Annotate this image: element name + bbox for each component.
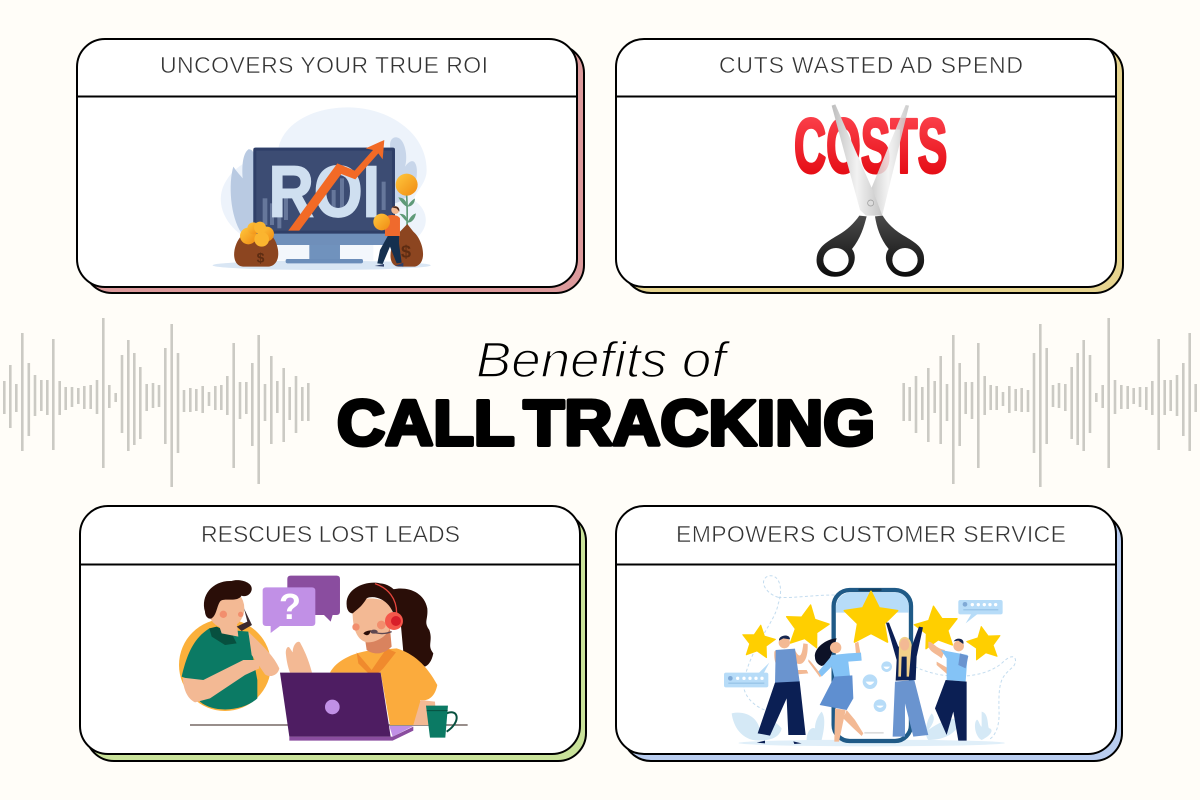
scissors handles	[817, 216, 924, 277]
illustration: people holding rating stars	[724, 576, 1016, 746]
icon: left money bag	[234, 222, 278, 267]
title	[337, 332, 875, 459]
growth arrow	[288, 140, 384, 231]
card body	[616, 39, 1116, 287]
illustration: caller and support agent	[179, 576, 468, 741]
figure: woman in blue skirt	[808, 638, 863, 742]
icon: smartphone	[834, 589, 911, 741]
table line	[190, 723, 468, 727]
card heading: CUTS WASTED AD SPEND	[719, 52, 1023, 78]
icon: purple laptop	[280, 673, 413, 741]
panel: uncovers your true ROI	[76, 39, 584, 293]
title line: Benefits of: Benefits of	[476, 332, 731, 388]
figure: blonde woman with raised arms	[886, 623, 928, 737]
figure: male caller	[179, 580, 279, 711]
icon: green mug	[426, 706, 457, 738]
icon: lilac question bubble: ?	[279, 586, 301, 627]
card shadow: green	[86, 513, 586, 761]
icon: purple speech bubble back	[287, 576, 340, 622]
card body	[616, 506, 1116, 754]
ground shadow	[738, 740, 1005, 746]
card heading: UNCOVERS YOUR TRUE ROI	[160, 52, 488, 78]
panel: empowers customer service	[615, 506, 1122, 761]
panel: cuts wasted ad spend	[615, 39, 1123, 293]
card body	[77, 39, 577, 287]
right sound waveform	[902, 318, 1197, 487]
figure: man carrying coin	[373, 206, 403, 267]
figure: man in light blue shirt	[928, 639, 968, 741]
icon: red headset	[370, 584, 403, 634]
dashed background trails	[743, 576, 1016, 740]
foliage	[732, 712, 992, 741]
scissors blades	[867, 105, 909, 216]
card heading: EMPOWERS CUSTOMER SERVICE	[676, 521, 1066, 547]
card shadow: yellow	[623, 45, 1123, 293]
card shadow: blue	[623, 513, 1122, 761]
illustration: scissors cutting costs	[794, 104, 947, 277]
icon: left money bag: $	[257, 249, 265, 265]
panel: rescues lost leads	[79, 506, 586, 761]
icon: right money bag and coin plant	[391, 174, 423, 267]
card heading: RESCUES LOST LEADS	[201, 521, 460, 547]
figure: man in vest	[757, 636, 808, 744]
figure: female agent with headset	[286, 583, 437, 725]
illustration text: COSTS: COSTS	[794, 104, 947, 190]
icon: lilac question bubble	[263, 586, 315, 633]
title line: CALL TRACKING: CALL TRACKING	[337, 387, 875, 459]
five gold stars	[740, 591, 1003, 661]
icon: right money bag and coin plant: $	[401, 241, 411, 261]
left sound waveform	[3, 318, 310, 487]
card body	[80, 506, 580, 754]
card shadow: pink	[84, 45, 584, 293]
illustration text: ROI: ROI	[269, 153, 380, 233]
rating bubble right	[958, 600, 1003, 623]
rating bubble left	[724, 663, 769, 687]
illustration: ROI monitor with growth arrow	[213, 107, 431, 270]
